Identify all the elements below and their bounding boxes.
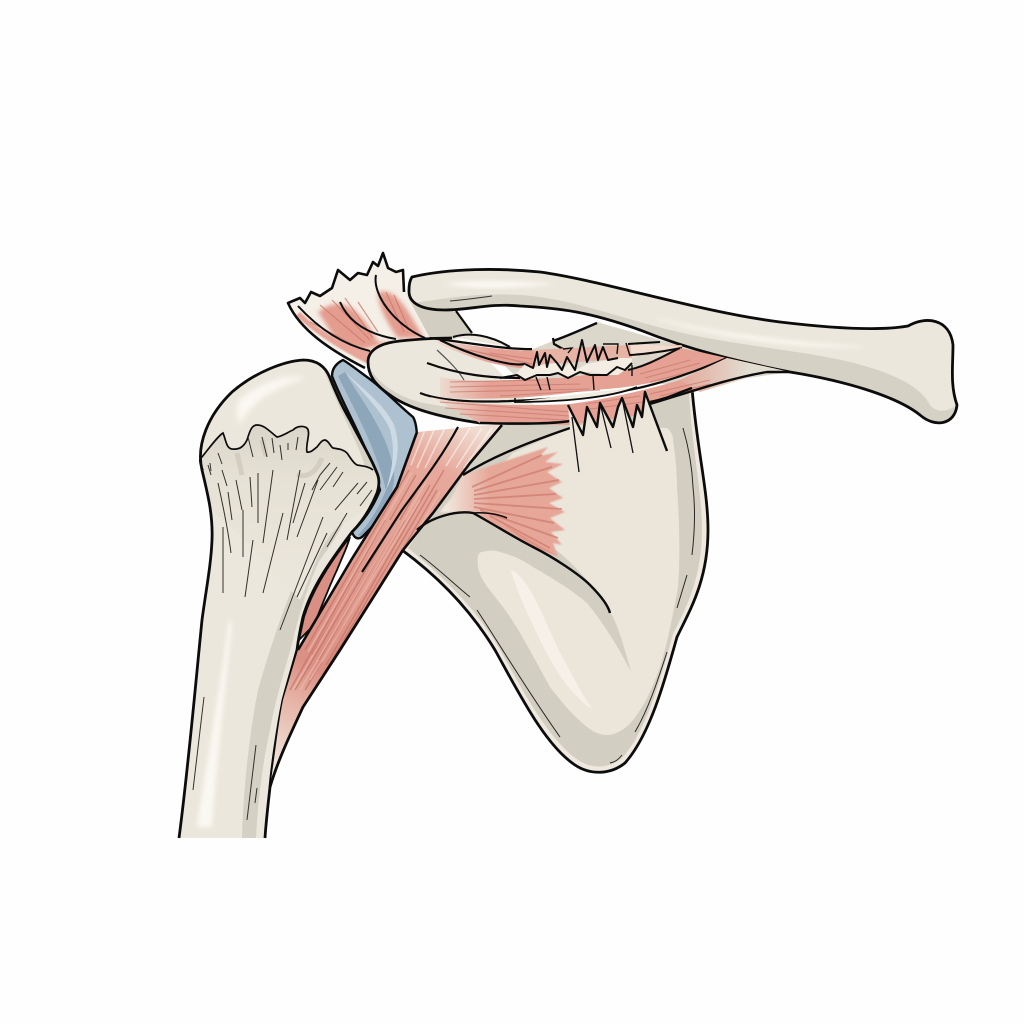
shoulder joint illustration bbox=[178, 252, 958, 838]
torn tendon teeth over scapula bbox=[568, 388, 692, 490]
tendon A, upper, torn bbox=[430, 335, 682, 368]
scapula light body bbox=[478, 425, 679, 735]
humerus neck shadow bbox=[323, 367, 377, 473]
glenoid cartilage bbox=[332, 360, 417, 538]
small muscle beside humerus bbox=[299, 537, 350, 640]
scapular spine behind tendons bbox=[500, 322, 790, 385]
trabecular grey patches bbox=[237, 440, 322, 476]
torn tendon fan, upper left bbox=[288, 253, 430, 368]
acromion bbox=[368, 338, 570, 424]
trabecular lines bbox=[208, 437, 372, 630]
humerus bbox=[179, 360, 379, 838]
scapula thin contour lines bbox=[420, 428, 694, 763]
clavicle bbox=[409, 269, 957, 423]
humerus shaft thin lines bbox=[193, 697, 257, 820]
tendon tear zigzag bbox=[500, 340, 632, 390]
strut wedge above subscapularis fan bbox=[463, 425, 570, 475]
long muscle band bbox=[270, 424, 502, 787]
scapula bbox=[402, 388, 708, 772]
cancellous bone head bbox=[200, 425, 377, 630]
tendon B, middle bbox=[420, 348, 727, 402]
tendon C, lower with tear bbox=[430, 358, 790, 425]
coracoid strut under clavicle bbox=[404, 290, 472, 345]
subscapularis fan on scapula bbox=[417, 428, 610, 613]
